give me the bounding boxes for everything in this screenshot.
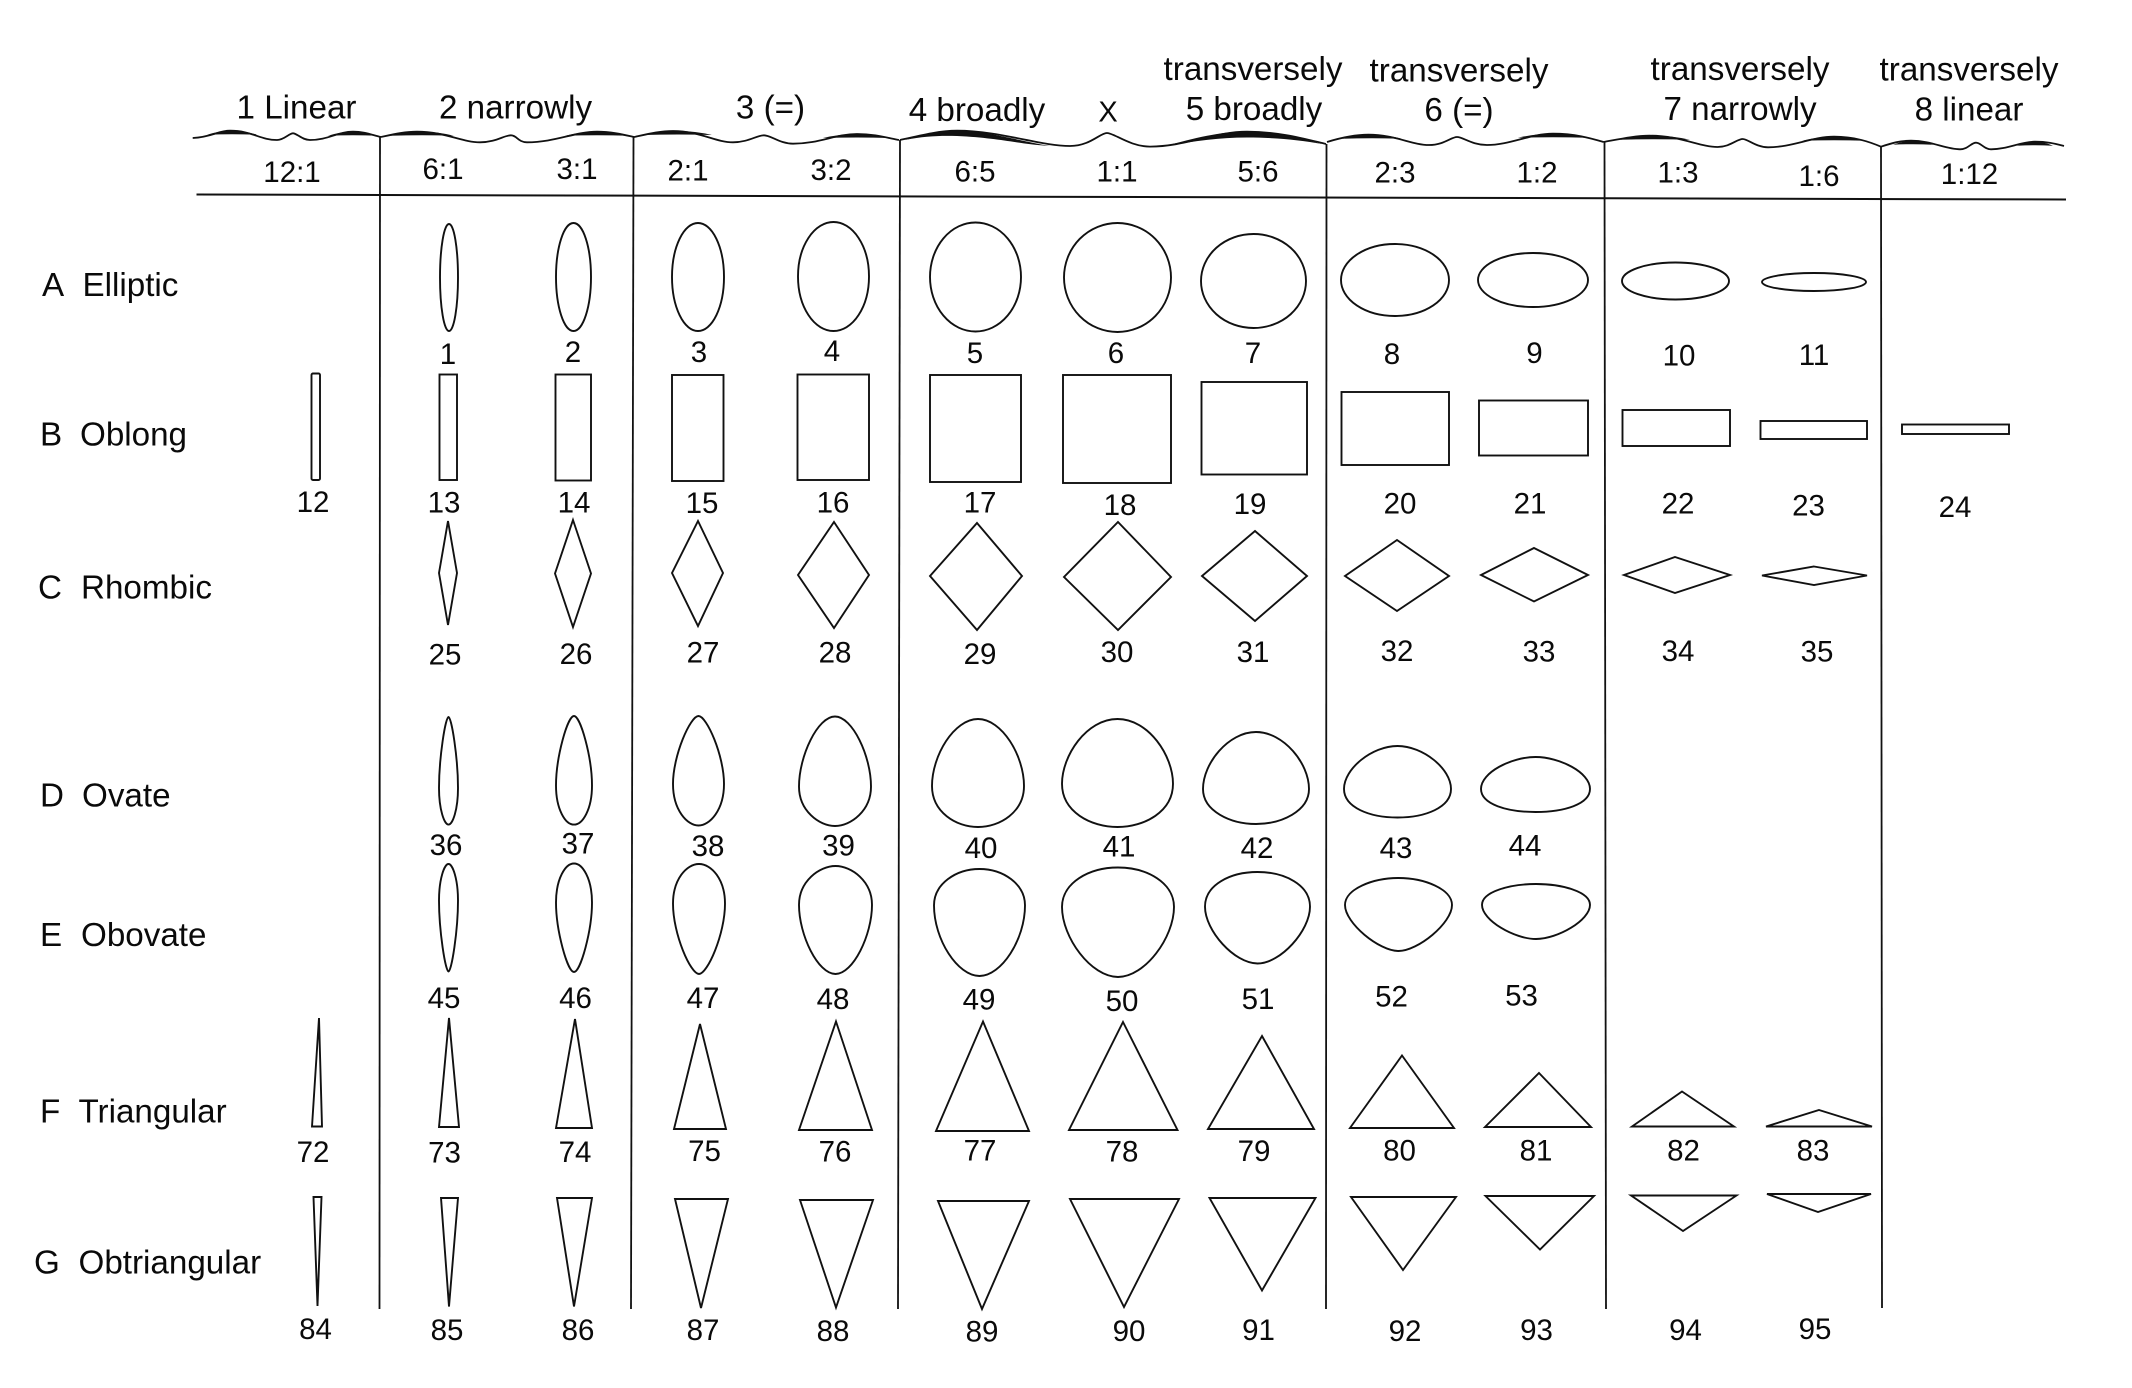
shapes and numbers 72 to 83: 83 [1797,1134,1829,1168]
shapes and numbers 45 to 53: 51 [1242,983,1274,1016]
row E: Obovate [40,864,1590,1018]
shapes and numbers 12 to 24: 18 [1104,489,1136,522]
row G: Obtriangular [34,1194,1871,1348]
row label: D Ovate [40,778,171,814]
ratio row: 1:2 [1516,156,1558,190]
shapes and numbers 12 to 24 [297,374,2009,524]
shapes and numbers 1 to 11: 3 [691,336,707,369]
heading: transversely 6 (=): 6 (=) [1424,92,1494,129]
row B: Oblong [40,374,2009,524]
shapes and numbers 45 to 53: 50 [1106,985,1138,1018]
shapes and numbers 1 to 11: 1 [440,338,456,371]
shapes and numbers 1 to 11: 2 [565,336,581,369]
shapes and numbers 84 to 95: 95 [1799,1313,1831,1346]
heading: transversely 8 linear [1880,52,2059,128]
shapes and numbers 72 to 83: 77 [964,1134,996,1168]
shapes and numbers 72 to 83: 75 [688,1135,721,1168]
row label: B Oblong: Oblong [80,416,187,454]
shapes and numbers 36 to 44: 38 [692,830,724,863]
shapes and numbers 25 to 35: 26 [560,638,592,671]
shapes and numbers 84 to 95: 93 [1520,1314,1553,1347]
shapes and numbers 72 to 83: 73 [428,1136,461,1170]
row label: F Triangular: F [40,1094,60,1130]
heading: transversely 8 linear: transversely [1880,52,2059,88]
heading: 1 Linear: 1 Linear [237,90,356,126]
shapes and numbers 84 to 95: 89 [966,1316,998,1348]
shapes and numbers 72 to 83: 79 [1238,1135,1270,1168]
heading: transversely 6 (=): transversely [1370,52,1549,90]
shapes and numbers 72 to 83: 82 [1667,1134,1700,1168]
ratio row: 1:3 [1657,156,1699,190]
row label: A Elliptic: A [42,267,65,304]
shapes and numbers 84 to 95: 94 [1669,1314,1702,1347]
row label: C Rhombic: Rhombic [81,570,212,606]
shapes and numbers 12 to 24: 16 [817,486,849,520]
shapes and numbers 12 to 24: 21 [1514,488,1546,520]
shapes and numbers 25 to 35: 31 [1237,636,1269,669]
shapes and numbers 1 to 11: 7 [1245,337,1261,370]
shapes and numbers 1 to 11 [440,222,1866,372]
row C: Rhombic [38,520,1867,672]
heading: transversely 8 linear: 8 linear [1915,92,2023,128]
ratio row: 5:6 [1237,156,1279,188]
ratio row: 6:5 [954,156,996,188]
shapes and numbers 25 to 35: 27 [687,636,719,670]
shapes and numbers 45 to 53: 47 [687,982,719,1015]
row label: E Obovate: Obovate [81,917,206,954]
shapes and numbers 45 to 53: 45 [428,982,460,1015]
shapes and numbers 36 to 44: 41 [1103,830,1135,864]
shapes and numbers 25 to 35: 30 [1101,636,1133,669]
shapes and numbers 1 to 11: 8 [1384,338,1400,371]
ratio row: 1:12 [1941,158,1998,191]
shapes and numbers 36 to 44: 36 [430,829,462,862]
shapes and numbers 12 to 24: 13 [428,486,460,520]
shapes and numbers 12 to 24: 24 [1939,491,1971,524]
shapes and numbers 84 to 95: 87 [687,1314,719,1347]
shapes and numbers 1 to 11: 9 [1526,337,1543,370]
heading: transversely 7 narrowly [1651,51,1830,128]
shapes and numbers 12 to 24: 15 [686,487,718,520]
shapes and numbers 25 to 35: 32 [1381,635,1413,668]
row label: D Ovate: D [40,778,64,814]
row A: Elliptic [42,222,1866,372]
row label: F Triangular: Triangular [78,1094,227,1130]
shapes and numbers 1 to 11: 5 [967,337,983,370]
row label: E Obovate: E [40,917,62,954]
ratio row [263,153,1998,193]
shapes and numbers 45 to 53: 46 [559,982,592,1015]
shapes and numbers 1 to 11: 10 [1663,340,1695,372]
shapes and numbers 45 to 53: 48 [817,983,849,1016]
heading: X: X [1098,96,1118,128]
ratio row: 6:1 [422,153,464,186]
row D: Ovate [40,716,1590,865]
shapes and numbers 1 to 11: 4 [824,335,840,368]
shapes and numbers 12 to 24: 23 [1792,490,1825,522]
shapes and numbers 25 to 35: 29 [964,638,996,671]
heading: transversely 5 broadly: transversely [1164,51,1343,88]
shapes and numbers 84 to 95: 86 [562,1314,594,1347]
shapes and numbers 12 to 24: 19 [1234,488,1266,521]
row label: C Rhombic: C [38,570,62,606]
wavy brace line under headings [193,130,2064,149]
shapes and numbers 25 to 35: 28 [819,636,851,670]
shapes and numbers 12 to 24: 17 [964,486,996,520]
shapes and numbers 45 to 53: 52 [1375,980,1408,1014]
shapes and numbers 84 to 95: 91 [1242,1314,1275,1347]
heading: transversely 5 broadly [1164,51,1343,128]
shapes and numbers 1 to 11: 6 [1108,337,1124,370]
shapes and numbers 45 to 53: 49 [963,984,995,1016]
ratio row: 1:6 [1798,160,1840,193]
shapes and numbers 12 to 24: 20 [1384,488,1416,520]
heading: transversely 5 broadly: 5 broadly [1186,91,1323,128]
heading: transversely 6 (=) [1370,52,1549,129]
shapes and numbers 12 to 24: 12 [297,486,329,519]
shapes and numbers 36 to 44: 44 [1509,830,1541,862]
shapes and numbers 72 to 83: 81 [1520,1134,1552,1168]
shapes and numbers 1 to 11: 11 [1799,339,1829,372]
row label: D Ovate: Ovate [82,778,171,814]
row label: A Elliptic: Elliptic [82,267,178,304]
shapes and numbers 25 to 35: 35 [1801,636,1833,668]
ratio row: 1:1 [1096,156,1138,188]
row label: G Obtriangular: G [34,1244,60,1282]
shapes and numbers 72 to 83: 80 [1383,1134,1416,1168]
shapes and numbers 72 to 83: 72 [297,1136,329,1169]
shapes and numbers 25 to 35: 33 [1523,636,1555,668]
shapes and numbers 36 to 44: 42 [1241,832,1273,865]
shapes and numbers 72 to 83: 78 [1106,1136,1138,1168]
heading: 3 (=): 3 (=) [736,90,805,126]
ratio row: 3:1 [556,153,598,186]
ratio row: 3:2 [810,154,852,187]
ratio row: 2:3 [1374,156,1416,190]
row label: G Obtriangular: Obtriangular [78,1244,261,1282]
shapes and numbers 84 to 95: 92 [1389,1315,1421,1348]
shapes and numbers 84 to 95: 90 [1113,1315,1145,1348]
shapes and numbers 72 to 83 [297,1018,1872,1170]
column headings [237,51,2059,129]
shapes and numbers 25 to 35 [429,520,1867,672]
heading: transversely 7 narrowly: 7 narrowly [1663,91,1817,128]
shapes and numbers 36 to 44: 39 [822,830,855,862]
heading: transversely 7 narrowly: transversely [1651,51,1830,88]
shapes and numbers 36 to 44: 37 [562,828,594,860]
shapes and numbers 12 to 24: 22 [1662,488,1694,520]
shapes and numbers 36 to 44: 40 [965,832,997,865]
shapes and numbers 45 to 53 [428,864,1590,1018]
shapes and numbers 84 to 95: 84 [299,1313,332,1346]
heading: 4 broadly: 4 broadly [909,92,1046,129]
shapes and numbers 45 to 53: 53 [1505,980,1538,1012]
shapes and numbers 36 to 44 [430,716,1590,865]
heading: 2 narrowly: 2 narrowly [439,90,592,126]
shapes and numbers 25 to 35: 34 [1662,635,1694,668]
ratio row: 2:1 [667,154,709,188]
row F: Triangular [40,1018,1872,1170]
shapes and numbers 72 to 83: 74 [559,1136,591,1169]
ratio row: 12:1 [263,156,321,189]
shapes and numbers 84 to 95: 85 [431,1314,463,1347]
row label: B Oblong: B [40,416,62,454]
shapes and numbers 72 to 83: 76 [819,1136,851,1168]
shapes and numbers 12 to 24: 14 [558,486,590,520]
shapes and numbers 84 to 95 [299,1194,1871,1348]
table rules [196,137,2066,1309]
shapes and numbers 36 to 44: 43 [1380,832,1412,865]
shapes and numbers 84 to 95: 88 [817,1315,849,1348]
shapes and numbers 25 to 35: 25 [429,638,461,672]
